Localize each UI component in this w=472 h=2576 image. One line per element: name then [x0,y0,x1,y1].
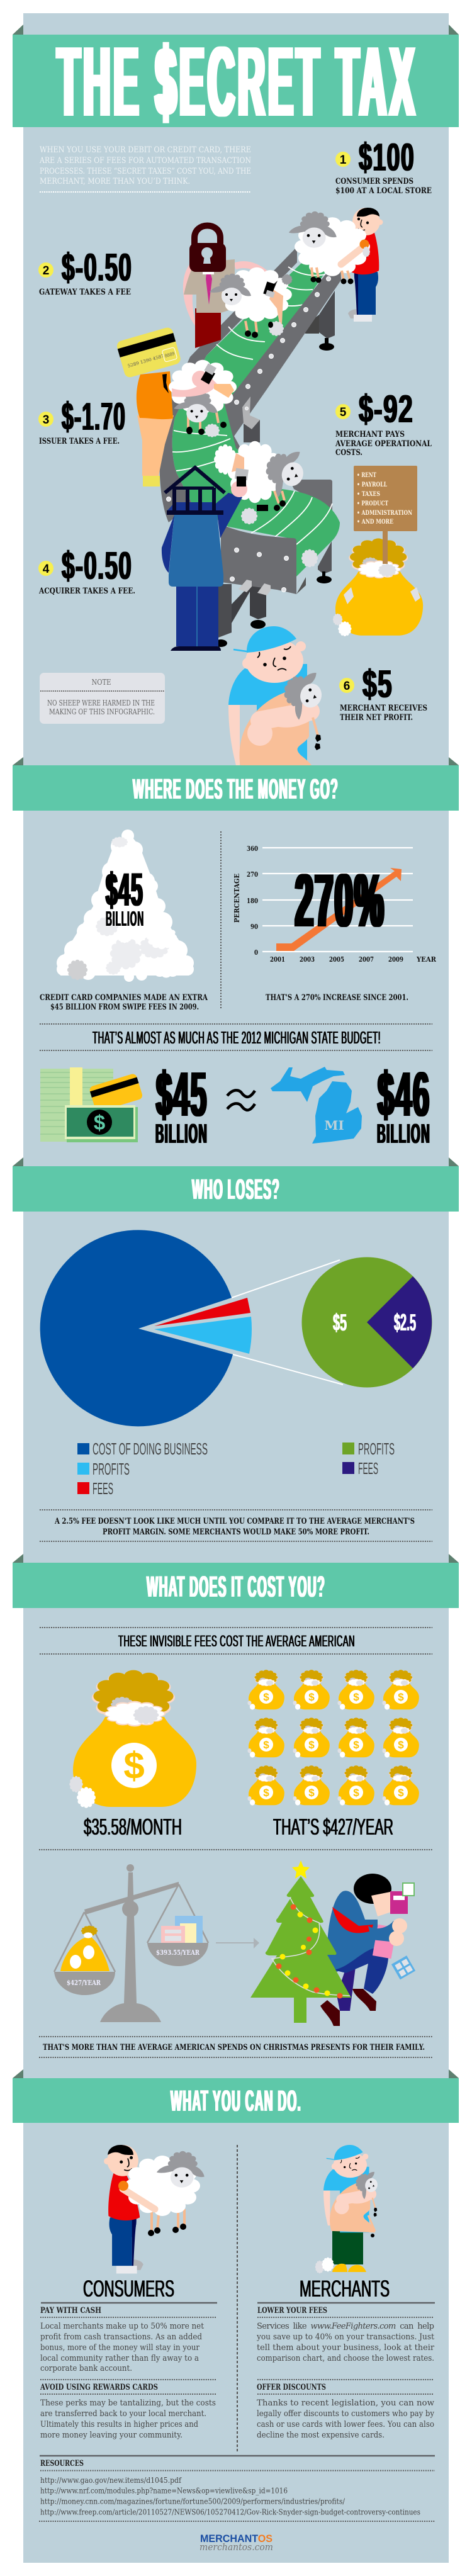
column: merchants: comparison chart, and choose the lowest rates. [257,2354,434,2363]
legend: right pie: FEES [358,1459,378,1478]
bag in left pan [60,1926,110,1971]
wool pile with $45 billion: BILLION [106,907,144,930]
legend: left pie: FEES [93,1479,113,1498]
step 5: operational costs [335,388,432,458]
pie chart: merchant revenue [40,1230,343,1426]
icon: lock head [189,225,226,272]
step 3: issuer fee: ISSUER TAKES A FEE. [39,437,120,446]
step 3: issuer fee [38,395,126,446]
sign text: • TAXES [357,491,380,498]
figure: gateway man with lock head [183,225,271,348]
line chart: 270% increase: 0 [254,948,258,957]
intro text: MERCHANT, MORE THAN YOU’D THINK. [40,177,190,186]
icons: twelve money bags: $ [353,1739,359,1751]
column: consumers: AVOID USING REWARDS CARDS [40,2383,158,2392]
column: merchants: decline the most expensive cards. [257,2431,385,2440]
line chart: 270% increase: 90 [250,923,258,931]
step 2: gateway fee: 2 [43,264,49,278]
note box [40,673,165,724]
column: consumers: bonus, more of the money will stay in your [40,2343,200,2353]
scale: fees versus christmas: $427/YEAR [67,1979,101,1987]
caption: credit card companies: $45 BILLION FROM SWIPE FEES IN 2009. [50,1003,199,1012]
resources: RESOURCES [40,2459,84,2468]
icons: twelve money bags: $ [263,1691,269,1703]
mid leg [244,420,260,442]
column: consumers: local community rather than fly away to a [40,2354,199,2363]
icon: large money bag [69,1670,196,1808]
step 2: gateway fee: GATEWAY TAKES A FEE [39,288,131,297]
icon: christmas tree [250,1860,351,2023]
column: merchants: MERCHANTS [300,2276,390,2302]
step 1: $100: $100 [359,136,415,179]
text: BILLION [155,1118,208,1149]
stat: $46 billion [377,1059,430,1149]
conveyor machine [160,247,341,647]
map: michigan [271,1067,362,1144]
icons: twelve money bags: $ [353,1787,359,1799]
stat: $45 billion [155,1059,208,1149]
note box: NO SHEEP WERE HARMED IN THE [47,699,155,707]
step 5: operational costs: AVERAGE OPERATIONAL [335,439,432,449]
icons: twelve money bags: $ [308,1691,315,1703]
icons: twelve money bags: $ [308,1739,315,1751]
wool pile with $45 billion: $45 [106,863,143,916]
step 1: $100: CONSUMER SPENDS [335,177,413,186]
intro text [39,145,251,192]
line chart: 270% increase: 360 [247,845,258,853]
column: merchants: Thanks to recent legislation, you can now [257,2399,434,2408]
line chart: 270% increase: 180 [247,897,258,905]
left rail [160,247,297,522]
step 6: net profit: MERCHANT RECEIVES [340,704,427,713]
column: merchants: tell them about your business, look at their [257,2343,435,2353]
sign text [354,466,417,531]
step 4: acquirer fee: ACQUIRER TAKES A FEE. [38,587,135,596]
column: consumers: profit from cash transactions. As an added [40,2332,202,2342]
line chart: 270% increase: 270 [247,870,258,879]
step 5: operational costs: MERCHANT PAYS [335,430,405,439]
line chart: 270% increase: 2007 [359,955,374,964]
note box: NOTE [92,678,111,687]
column: merchants: you save up to 40% on your transactions. Just [256,2332,435,2342]
figure: acquirer bank man [162,468,249,651]
icon: bank building head [165,468,225,515]
resources: http://www.nrf.com/modules.php?name=News&op=viewlive&sp_id=1016 [40,2486,288,2495]
step 4: acquirer fee [38,544,135,596]
ribbon: who loses: WHO LOSES? [192,1173,280,1205]
approximately equal sign [227,1090,255,1110]
sign text: • ADMINISTRATION [357,510,412,517]
legend: left pie [77,1439,208,1498]
column: merchants [256,2276,435,2440]
resources: http://www.gao.gov/new.items/d1045.pdf [40,2476,182,2485]
step 3: issuer fee: 3 [43,413,49,427]
sign text: • AND MORE [357,519,393,526]
icon: money stack, bill and card [40,1067,143,1142]
column: consumers [40,2276,217,2440]
line chart: 270% increase: 2003 [300,955,315,964]
step 6: net profit: 6 [344,680,350,693]
column: merchants: LOWER YOUR FEES [257,2306,327,2315]
figure: issuer woman with credit card [116,326,182,487]
intro text: ARE A SERIES OF FEES FOR AUTOMATED TRANSACTION [39,156,251,166]
line chart: 270% increase [233,845,437,964]
icons: twelve money bags [247,1670,419,1806]
column: consumers: Ultimately this results in higher prices and [40,2420,198,2429]
icon: money stack, bill and card: $ [94,1111,105,1134]
resources [39,2456,435,2521]
upper right housing [289,480,332,511]
line chart: 270% increase: YEAR [416,955,437,964]
legend: right pie: PROFITS [358,1439,395,1458]
icon: credit card [116,326,182,378]
step 3: issuer fee: $-1.70 [62,395,126,439]
profits slice [154,1317,252,1354]
front panel [221,524,296,594]
ribbon: main title [13,25,459,137]
caption: credit card companies [40,993,208,1012]
ribbon: who loses [13,1157,459,1212]
pie chart: profit versus fees [302,1257,432,1387]
legend: left pie: PROFITS [93,1460,130,1478]
scale: fees versus christmas: $393.55/YEAR [156,1949,200,1957]
icon: large money bag: $ [123,1745,145,1787]
icons: twelve money bags: $ [353,1691,359,1703]
ribbon: what you can do [13,2069,459,2123]
icons: twelve money bags: $ [308,1787,315,1799]
step 1: $100: $100 AT A LOCAL STORE [335,186,432,196]
figure: sheep on conveyor 2 [210,267,292,338]
gifts in right pan [161,1916,203,1943]
column: consumers: are transferred back to your local merchant. [40,2409,206,2419]
icons: twelve money bags: $ [263,1739,269,1751]
caption: 2.5% fee: PROFIT MARGIN. SOME MERCHANTS WOULD MAKE 50% MORE PROFIT. [103,1527,369,1537]
figure: sheep on conveyor 3 [162,360,237,437]
icons: twelve money bags: $ [398,1691,404,1703]
column: consumers: CONSUMERS [83,2276,174,2302]
figure: sad merchant with shorn sheep [228,626,327,777]
step 2: gateway fee: $-0.50 [62,246,132,290]
figure: sheep on conveyor 4 [214,441,318,567]
step 5: operational costs: $-92 [359,388,413,431]
step 1: $100 [335,136,432,196]
step 5: operational costs: 5 [340,406,347,419]
intro text: PROCESSES. THESE “SECRET TAXES” COST YOU, AND THE [40,167,251,176]
column: consumers: more money leaving your community. [40,2431,183,2440]
sign text: • PAYROLL [357,481,387,488]
step 6: net profit: THEIR NET PROFIT. [340,713,413,723]
icons: twelve money bags: $ [398,1787,404,1799]
money sack [333,538,423,636]
caption: 270%: THAT'S A 270% INCREASE SINCE 2001. [266,993,408,1003]
line chart: 270% increase: 2009 [388,955,403,964]
legend: left pie: COST OF DOING BUSINESS [93,1439,208,1458]
sign text: • RENT [357,472,376,479]
arrow to christmas tree [216,1938,259,1949]
column: merchants: cash or use cards with lower fees. You can also [257,2420,434,2429]
fees slice [154,1298,250,1326]
line chart: 270% increase: 2005 [329,955,344,964]
label: monthly cost: $35.58/MONTH [84,1814,182,1840]
figure: consumer with sheep [104,2145,205,2274]
logo: merchantos [199,2533,273,2553]
pie chart: profit versus fees: $2.5 [394,1310,416,1336]
legend: right pie [342,1439,395,1478]
lower legs [318,541,332,574]
figure: consumer holding sheep [289,208,383,322]
step 2: gateway fee [38,246,132,297]
step 4: acquirer fee: 4 [43,563,50,576]
step 5: operational costs: COSTS. [335,448,362,458]
column: consumers: corporate bank account. [40,2364,132,2373]
arrow [276,868,402,951]
figure: merchant with shorn sheep [315,2145,381,2273]
text: $45 [156,1059,208,1130]
caption: credit card companies: CREDIT CARD COMPANIES MADE AN EXTRA [40,993,208,1003]
line chart: 270% increase: 2001 [270,955,285,964]
figure: sign and sack of wool [333,466,423,636]
icon: credit card: 8889 [164,351,175,359]
column: consumers: These perks may be tantalizing, but the costs [40,2399,216,2408]
ribbon: where does the money go [13,757,459,811]
ribbon: what does it cost you [13,1554,459,1608]
label: yearly cost: THAT’S $427/YEAR [273,1814,393,1840]
green belt [172,262,340,577]
column: consumers: PAY WITH CASH [40,2306,101,2315]
step 6: net profit: $5 [362,663,393,706]
rivets [166,277,331,501]
column: merchants: OFFER DISCOUNTS [257,2383,326,2392]
step 4: acquirer fee: $-0.50 [62,544,132,588]
map: michigan: MI [324,1118,344,1133]
column: merchants: Services like www.FeeFighters.com can help [257,2322,434,2331]
icons: twelve money bags: $ [263,1787,269,1799]
scale: fees versus christmas [54,1864,208,2022]
logo: merchantos: merchantos.com [199,2541,273,2553]
right rail [225,256,341,454]
resources: http://money.cnn.com/magazines/fortune/fortune500/2009/performers/industries/profits/ [40,2497,346,2506]
column: merchants: legally offer discounts to customers who pay by [257,2409,435,2419]
resources: http://www.freep.com/article/20110527/NEWS06/105270412/Gov-Rick-Snyder-sign-budget-controversy-continues [40,2507,420,2516]
logo: merchantos: MERCHANTOS [200,2533,273,2545]
column: consumers: Local merchants make up to 50% more net [40,2322,205,2331]
sign text: • PRODUCT [357,500,388,507]
wool pile with $45 billion [57,830,194,982]
caption: 2.5% fee [40,1510,432,1541]
step 1: $100: 1 [340,154,347,167]
line chart: 270% increase: PERCENTAGE [233,874,241,923]
pie chart: profit versus fees: $5 [333,1310,347,1336]
note box: MAKING OF THIS INFOGRAPHIC. [49,707,155,716]
icon: credit card: 5289 1390 4587 [127,354,165,369]
step 6: net profit [339,663,427,723]
intro text: WHEN YOU USE YOUR DEBIT OR CREDIT CARD, THERE [40,145,251,155]
figure: shopper with gifts [320,1874,415,2026]
belt stripes [172,267,332,544]
icons: twelve money bags: $ [398,1739,404,1751]
back leg upper [319,291,335,339]
